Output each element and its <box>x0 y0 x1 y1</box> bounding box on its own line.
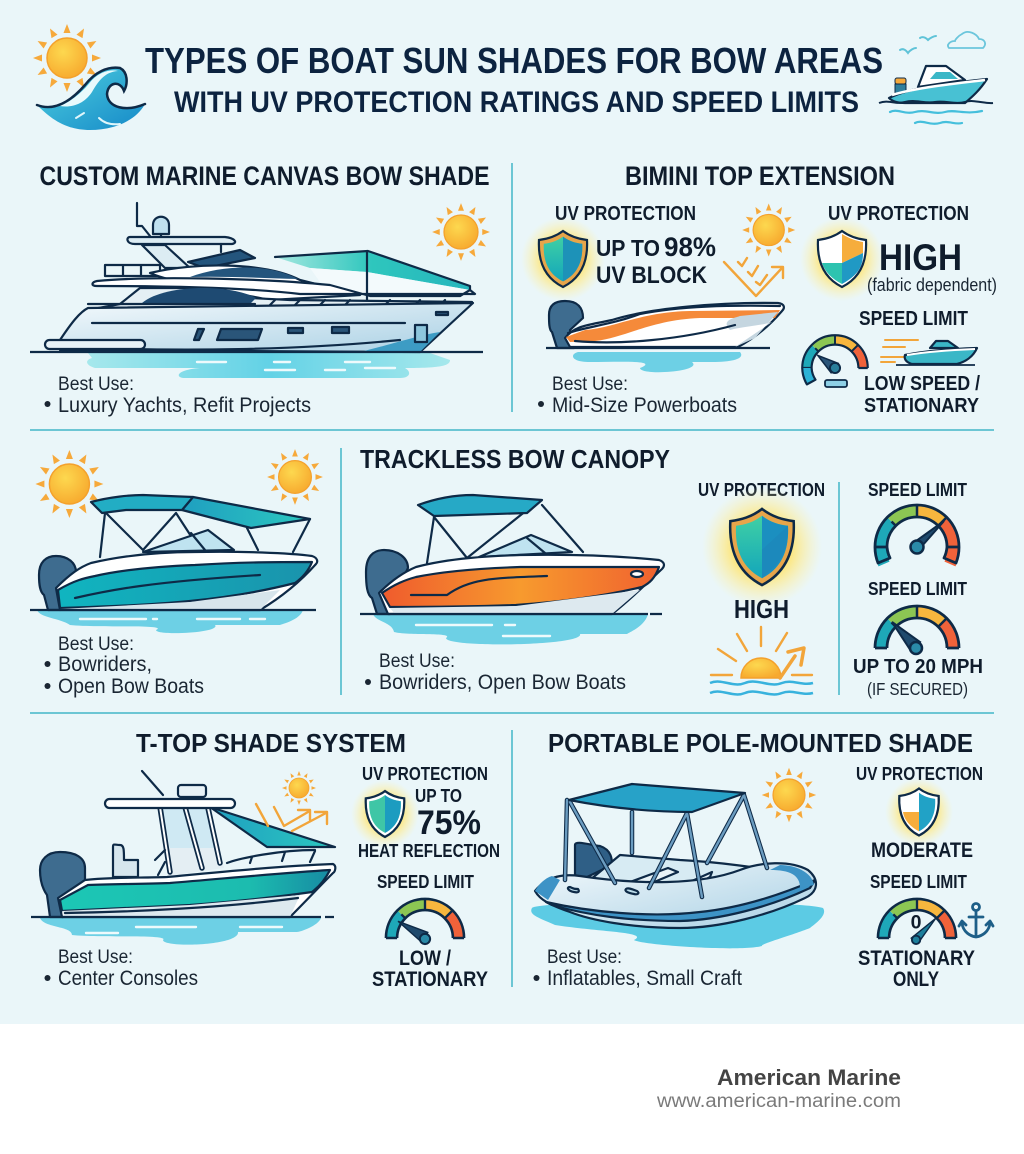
footer branding: www.american-marine.com <box>656 1091 901 1112</box>
best use: Bowriders, <box>58 653 152 676</box>
uv value 2: (fabric dependent) <box>867 275 997 295</box>
uv value <box>358 786 500 861</box>
icon: gauge 20 mph <box>875 606 959 654</box>
icon: gauge <box>875 505 959 564</box>
uv label: UV PROTECTION <box>698 480 825 500</box>
speed value: LOW SPEED / <box>864 372 980 395</box>
heading: TRACKLESS BOW CANOPY <box>360 446 670 474</box>
speed value: UP TO 20 MPH <box>853 655 983 678</box>
panel: bimini top extension <box>521 161 997 417</box>
uv value: 98% <box>664 232 716 262</box>
illustration: yacht <box>30 203 483 378</box>
uv value: UP TO <box>415 786 462 806</box>
icon: sun <box>762 768 816 822</box>
best use: Best Use: <box>58 374 134 395</box>
best use: Luxury Yachts, Refit Projects <box>58 394 311 417</box>
best use: Open Bow Boats <box>58 675 204 698</box>
speed value <box>853 655 983 699</box>
icon: header boat <box>879 32 993 124</box>
icon: speeding boat <box>881 340 977 365</box>
heading: BIMINI TOP EXTENSION <box>625 161 895 191</box>
uv value 2 <box>867 237 997 295</box>
icon: shield high <box>800 217 884 301</box>
best use: Best Use: <box>379 651 455 672</box>
speed label: SPEED LIMIT <box>859 308 968 330</box>
best use: Best Use: <box>552 374 628 395</box>
panel: bow canopy boat <box>30 449 323 698</box>
heading: CUSTOM MARINE CANVAS BOW SHADE <box>40 161 490 191</box>
speed value: STATIONARY <box>372 968 488 991</box>
illustration: teal bowrider <box>30 495 317 633</box>
best use <box>44 947 198 990</box>
speed value <box>372 947 488 991</box>
illustration: powerboat <box>546 301 784 372</box>
uv value 2: HIGH <box>879 237 962 278</box>
illustration: center console boat <box>31 771 335 945</box>
best use <box>538 374 737 417</box>
subtitle: WITH UV PROTECTION RATINGS AND SPEED LIMITS <box>174 86 859 119</box>
icon: low gauge pill <box>825 380 847 387</box>
uv label: UV PROTECTION <box>555 203 696 225</box>
speed value: LOW / <box>399 947 451 970</box>
speed value: STATIONARY <box>858 947 975 970</box>
icon: sun <box>432 203 490 261</box>
panel: t-top shade system <box>31 730 500 991</box>
icon: gauge zero <box>878 899 956 944</box>
panel: custom marine canvas bow shade <box>30 161 490 417</box>
uv value: UP TO <box>596 235 660 261</box>
icon: shield <box>351 780 419 848</box>
footer branding <box>656 1065 901 1112</box>
icon: sunrise arrow <box>710 627 813 694</box>
uv label: UV PROTECTION <box>856 764 983 784</box>
heading: T-TOP SHADE SYSTEM <box>136 730 406 758</box>
icon: gauge zero: 0 <box>911 912 922 934</box>
icon: shield moderate <box>885 778 953 846</box>
icon: sun large <box>35 450 103 518</box>
icon: sun <box>742 203 795 257</box>
icon: large shield <box>702 487 822 607</box>
speed value <box>864 372 980 417</box>
best use: Bowriders, Open Bow Boats <box>379 671 626 694</box>
icon: gauge low <box>802 335 868 384</box>
speed value <box>858 947 975 991</box>
uv value: MODERATE <box>871 839 973 862</box>
best use: Best Use: <box>58 634 134 655</box>
best use <box>534 947 742 990</box>
panel: trackless bow canopy <box>360 446 983 699</box>
speed value: STATIONARY <box>864 394 979 417</box>
uv value: 75% <box>417 804 481 842</box>
speed label: SPEED LIMIT <box>870 872 967 892</box>
best use <box>44 634 204 698</box>
best use: Center Consoles <box>58 967 198 990</box>
title: TYPES OF BOAT SUN SHADES FOR BOW AREAS <box>145 40 883 81</box>
dividers <box>30 163 994 987</box>
heading: PORTABLE POLE-MOUNTED SHADE <box>548 730 973 758</box>
header <box>33 24 993 130</box>
best use: Best Use: <box>58 947 133 968</box>
speed label: SPEED LIMIT <box>377 872 474 892</box>
best use <box>365 651 626 694</box>
best use: Mid-Size Powerboats <box>552 394 737 417</box>
best use: Inflatables, Small Craft <box>547 967 742 990</box>
icon: shield 98 <box>521 217 605 301</box>
icon: header wave <box>37 68 145 130</box>
uv label 2: UV PROTECTION <box>828 203 969 225</box>
speed value: ONLY <box>893 968 939 991</box>
panel: portable pole-mounted shade <box>531 730 993 991</box>
uv value <box>596 232 716 289</box>
icon: header sun <box>33 24 101 92</box>
illustration: orange bowrider <box>360 495 664 644</box>
uv value: HEAT REFLECTION <box>358 841 500 861</box>
uv value: UV BLOCK <box>596 262 708 289</box>
icon: sun <box>282 771 316 805</box>
icon: anchor <box>959 904 993 937</box>
footer branding: American Marine <box>717 1065 901 1090</box>
speed label 1: SPEED LIMIT <box>868 480 967 500</box>
uv value: HIGH <box>734 596 789 624</box>
illustration: inflatable boat with canopy <box>531 784 824 948</box>
icon: heat reflection arrows <box>256 804 327 831</box>
icon: sun small <box>267 449 323 505</box>
best use <box>44 374 311 417</box>
uv label: UV PROTECTION <box>362 764 488 784</box>
speed value: (IF SECURED) <box>867 679 968 699</box>
icon: gauge <box>386 899 464 944</box>
best use: Best Use: <box>547 947 622 968</box>
icon: reflection arrow <box>724 258 783 296</box>
speed label 2: SPEED LIMIT <box>868 579 967 599</box>
